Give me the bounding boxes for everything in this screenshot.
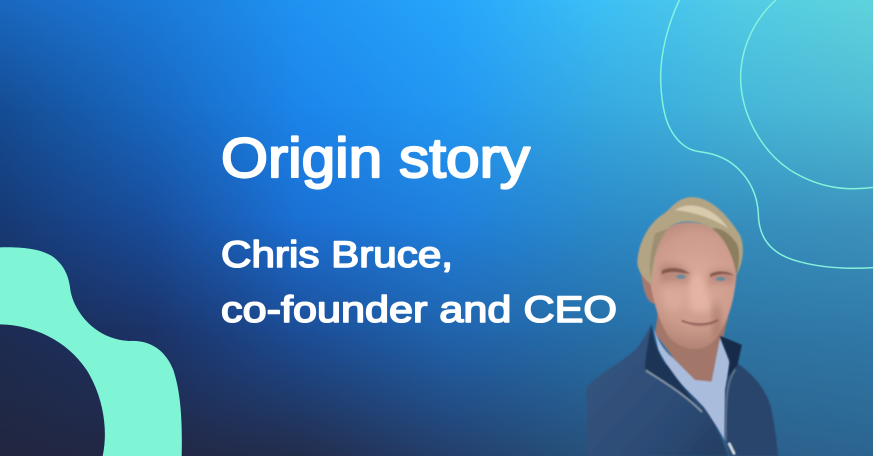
hair [637, 197, 743, 285]
outline curves top right [661, 0, 873, 268]
teal blob bottom left [0, 247, 182, 456]
subtitle: name and role: co-founder and CEO [221, 289, 617, 330]
jacket [587, 323, 778, 456]
subtitle: name and role [221, 234, 617, 330]
face [641, 222, 737, 349]
subtitle: name and role: Chris Bruce, [221, 234, 453, 275]
portrait photo [587, 197, 778, 456]
neck and shirt [653, 310, 730, 440]
title: Origin story [221, 126, 530, 189]
jacket zipper [647, 370, 735, 453]
